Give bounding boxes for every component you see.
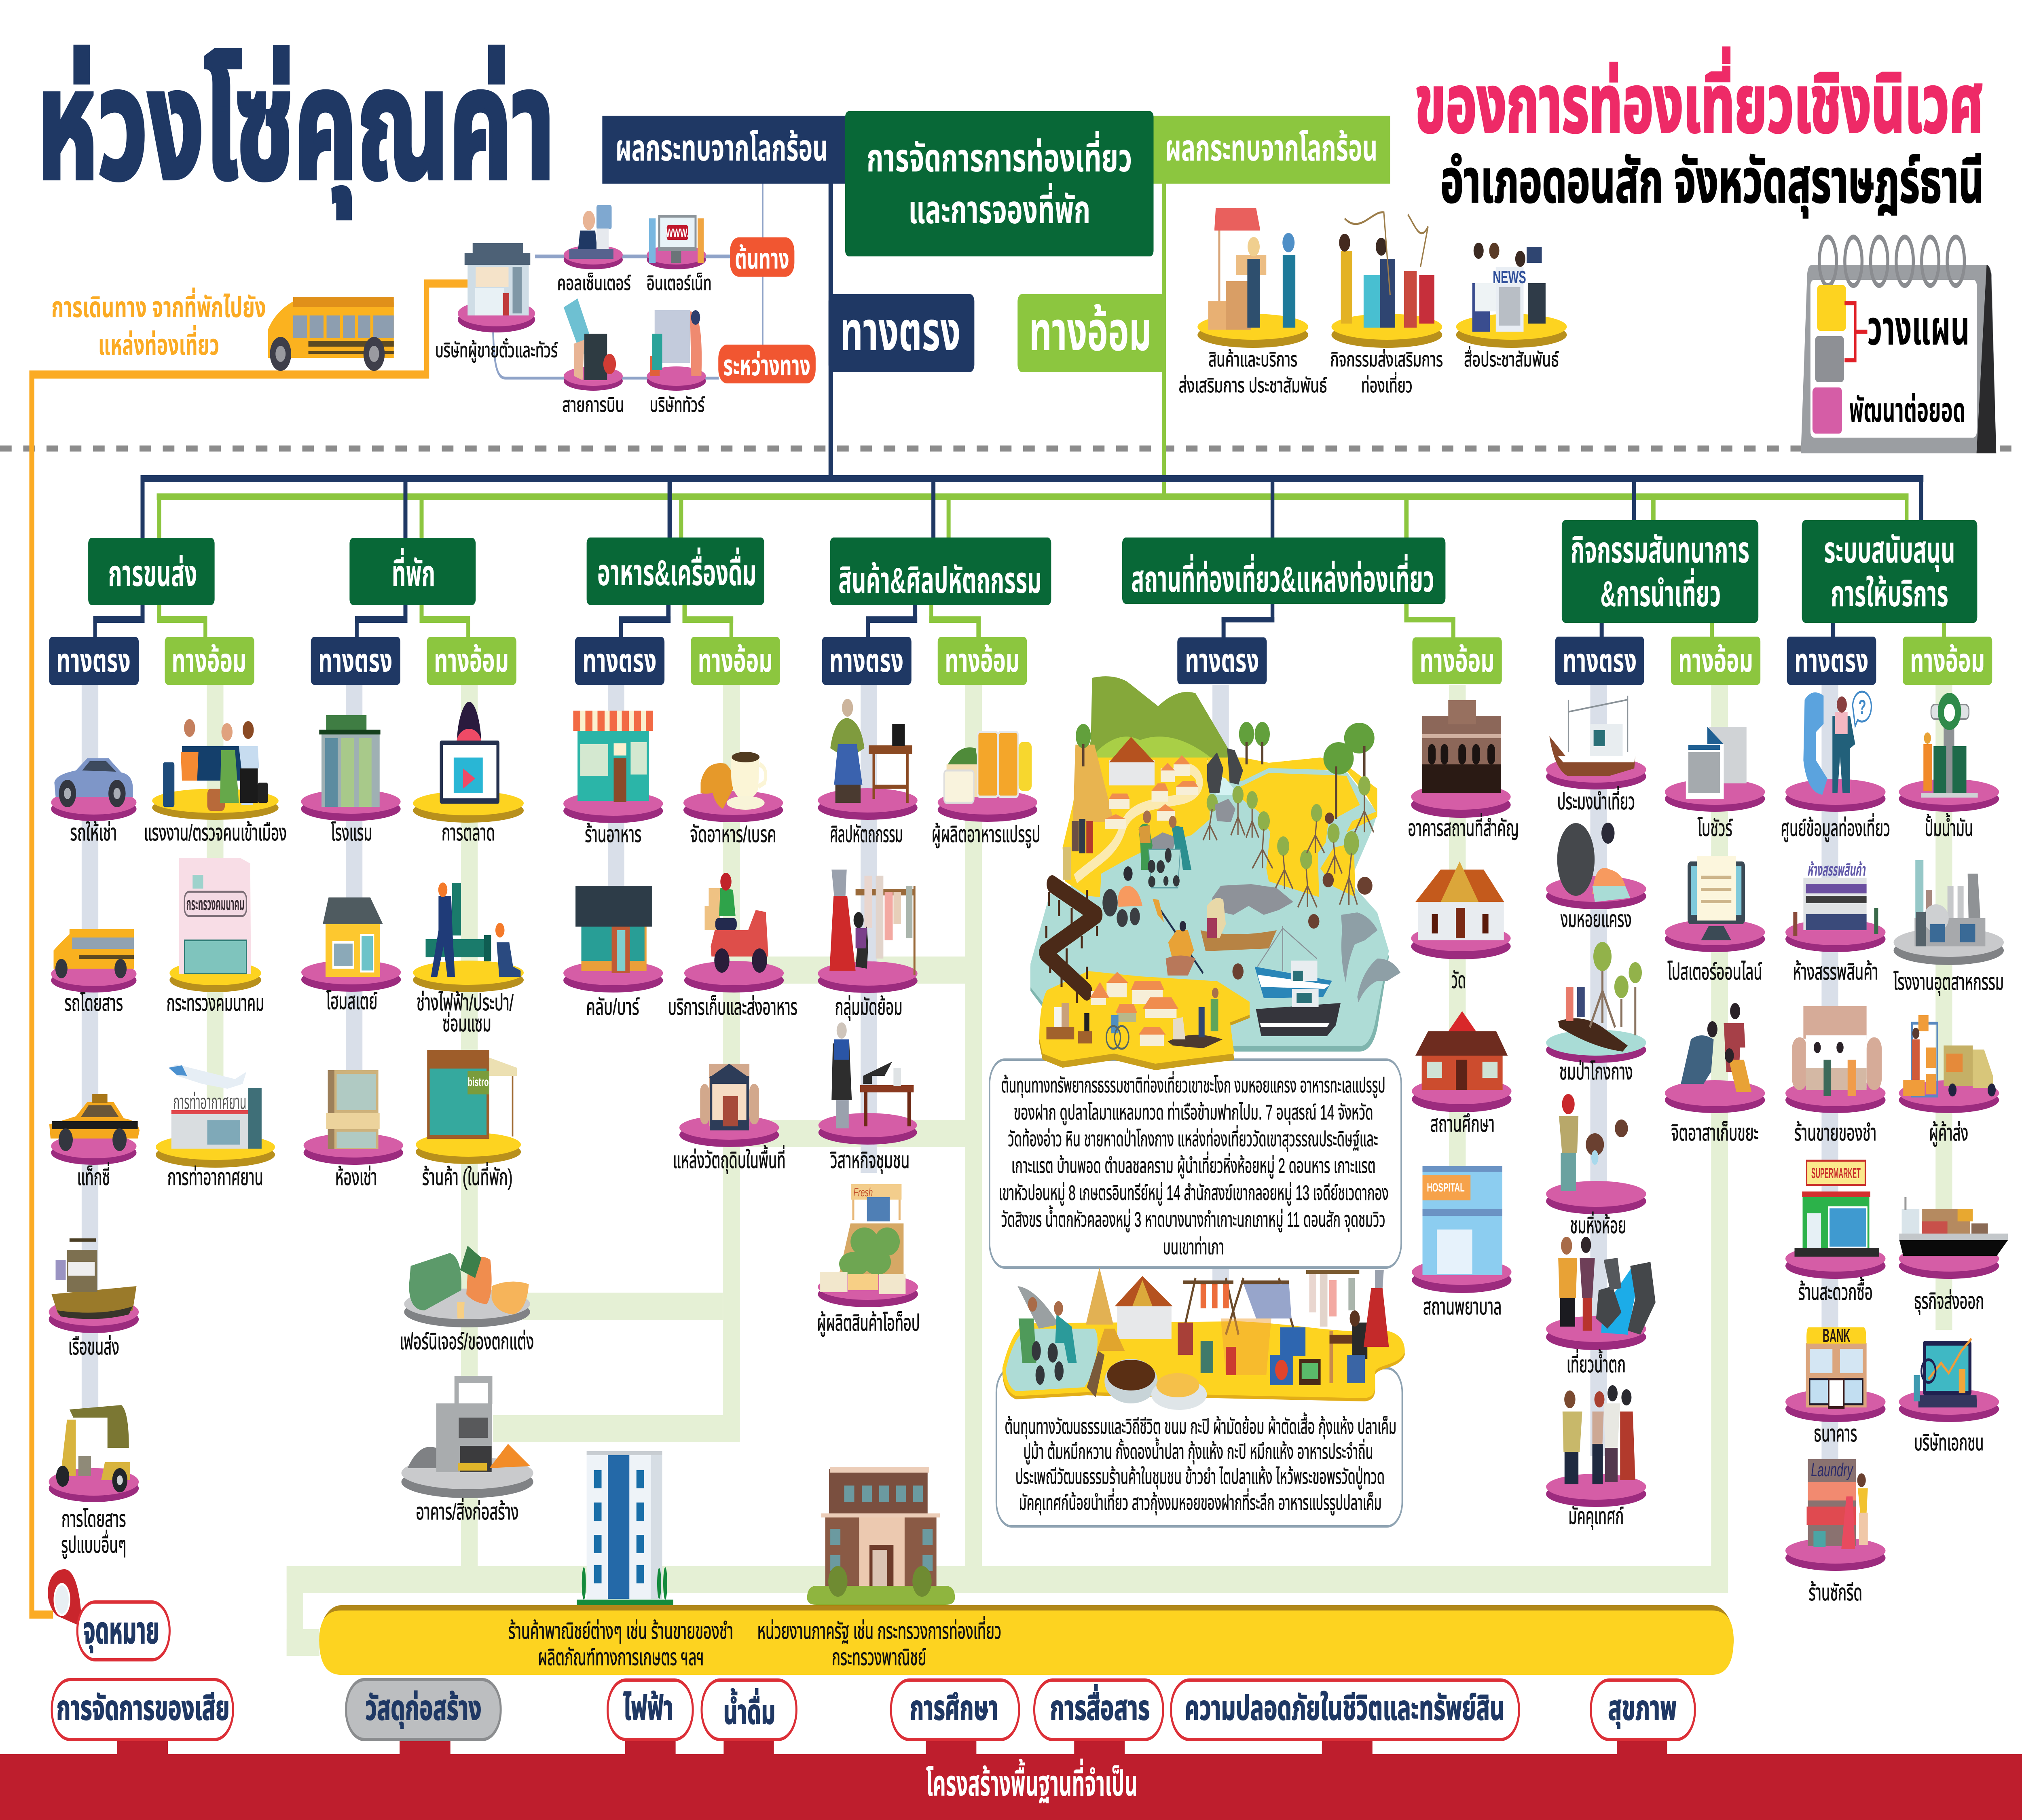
item: convenience store: SUPERMARKET — [1811, 1166, 1861, 1181]
item: important buildings: อาคารสถานที่สำคัญ — [1408, 813, 1519, 841]
item: public relations media: NEWS — [1493, 267, 1526, 287]
item: tour guide — [1546, 1385, 1646, 1530]
header: climate impact direct: ผลกระทบจากโลกร้อน — [615, 127, 828, 168]
item: cargo boat: เรือขนส่ง — [68, 1334, 119, 1359]
item: brochure: โบชัวร์ — [1698, 816, 1733, 841]
right title: ของการท่องเที่ยวเชิงนิเวศ — [1415, 48, 1984, 149]
pill: construction materials: วัสดุก่อสร้าง — [365, 1689, 482, 1729]
text box: natural resource capital — [990, 1060, 1401, 1268]
item: department store — [1785, 861, 1885, 984]
travel caption — [51, 288, 266, 361]
item: OTOP producer — [817, 1184, 920, 1336]
item: restaurant: ร้านอาหาร — [585, 822, 641, 847]
item: hospital: HOSPITAL — [1427, 1181, 1465, 1194]
sub-headers: direct and indirect tabs: ทางอ้อม — [434, 643, 509, 679]
badge: indirect: ทางอ้อม — [1029, 301, 1152, 362]
category: recreation and guiding: &การนำเที่ยว — [1600, 568, 1721, 614]
item: airline — [562, 298, 624, 416]
pill: electricity: ไฟฟ้า — [623, 1689, 673, 1727]
category: goods and crafts — [830, 538, 1051, 605]
category: food and drink: อาหาร&เครื่องดื่ม — [597, 547, 757, 593]
item: wholesaler: ผู้ค้าส่ง — [1929, 1120, 1968, 1146]
icon: calendar legend — [1801, 237, 1996, 453]
item: goods and services promotion — [1179, 208, 1327, 397]
illustration: eco-tourism nature map — [1030, 676, 1400, 1070]
item: furniture and decoration — [400, 1246, 534, 1354]
item: building and construction — [401, 1376, 533, 1524]
header: tourism management: การจัดการการท่องเที่ยว — [867, 131, 1132, 180]
item: club and bar: คลับ/บาร์ — [586, 995, 640, 1020]
text box: natural resource capital: ต้นทุนทางทรัพยากรธรรมชาติท่องเที่ยวเขาชะโงก งมหอยแครง อาหารทะเลแปรรูป — [1001, 1071, 1385, 1098]
item: mangrove forest visit — [1546, 942, 1646, 1084]
illustration: culture and way of life — [1003, 1268, 1405, 1410]
sub-headers: direct and indirect tabs: ทางตรง — [1563, 643, 1637, 679]
sub-headers: direct and indirect tabs: ทางตรง — [1185, 643, 1259, 679]
item: community enterprise — [819, 1022, 917, 1174]
pale background stripes linking the value chain — [82, 685, 1952, 1656]
pill: destination — [77, 1602, 169, 1660]
item: industrial plant — [1893, 860, 2004, 995]
item: call center: คอลเซ็นเตอร์ — [557, 271, 631, 294]
item: internet: อินเตอร์เน็ท — [647, 271, 712, 294]
text box: culture and way of life capital: ประเพณีวัฒนธรรมร้านค้าในชุมชน ข้าวยำ ไตปลาแห้ง ไหว้พระขอพรวัดปู่ทวด — [1015, 1465, 1385, 1489]
sub-headers: direct and indirect tabs: ทางอ้อม — [698, 643, 773, 679]
category: recreation and guiding — [1562, 520, 1758, 623]
pill: in transit — [718, 345, 816, 383]
item: tour guide: มัคคุเทศก์ — [1568, 1504, 1624, 1530]
item: waterfall trip — [1546, 1237, 1656, 1377]
pill: communication — [1034, 1680, 1163, 1740]
icon: destination pin — [48, 1569, 82, 1627]
item: tie-dye group: กลุ่มมัดย้อม — [835, 995, 903, 1020]
item: OTOP producer: Fresh — [853, 1186, 873, 1199]
pill: safety of life and property: ความปลอดภัยในชีวิตและทรัพย์สิน — [1185, 1689, 1504, 1727]
item: processed food producer: ผู้ผลิตอาหารแปรรูป — [932, 822, 1040, 848]
pill: health: สุขภาพ — [1608, 1689, 1677, 1729]
item: furniture and decoration: เฟอร์นิเจอร์/ของตกแต่ง — [400, 1329, 534, 1354]
category: accommodation: ที่พัก — [392, 548, 435, 594]
infrastructure band — [0, 1737, 2022, 1820]
item: gas station — [1899, 693, 1999, 841]
item: other transport (tuk-tuk) — [49, 1405, 139, 1558]
pill: communication: การสื่อสาร — [1050, 1684, 1150, 1727]
item: hospital — [1412, 1166, 1512, 1319]
item: volunteer waste collection: จิตอาสาเก็บขยะ — [1671, 1120, 1759, 1145]
item: catering — [683, 752, 783, 847]
item: goods and services promotion: ส่งเสริมการ ประชาสัมพันธ์ — [1179, 374, 1327, 397]
item: homestay — [301, 897, 401, 1014]
item: grocery shop — [1785, 1006, 1885, 1145]
pill: in transit: ระหว่างทาง — [723, 350, 810, 382]
text box: natural resource capital: ของฝาก ดูปลาโลมาแหลมทวด ท่าเรือข้ามฟากไปม. 7 อนุสรณ์ 14 จังหวัด — [1014, 1101, 1373, 1125]
pill: drinking water — [702, 1680, 796, 1740]
item: electrician and plumber: ซ่อมแซม — [442, 1011, 491, 1036]
item: industrial plant: โรงงานอุตสาหกรรม — [1893, 969, 2004, 995]
item: food delivery: บริการเก็บและส่งอาหาร — [668, 995, 797, 1020]
item: fishing tour: ประมงนำเที่ยว — [1557, 786, 1635, 814]
yellow foundation bar with captions: ร้านค้าพาณิชย์ต่างๆ เช่น ร้านขายของชำ — [508, 1619, 733, 1644]
item: department store: ห้างสรรพสินค้า — [1807, 861, 1866, 880]
pill: drinking water: น้ำดื่ม — [723, 1688, 776, 1731]
pill: waste management: การจัดการของเสีย — [57, 1689, 230, 1727]
item: tourist information center: ศูนย์ข้อมูลท่องเที่ยว — [1781, 813, 1890, 842]
item: convenience store: ร้านสะดวกซื้อ — [1798, 1276, 1873, 1305]
item: tourist information center: ? — [1858, 695, 1866, 718]
header: tourism management: และการจองที่พัก — [908, 183, 1090, 231]
text box: natural resource capital: บนเขาท่าเภา — [1163, 1236, 1224, 1259]
icon: calendar legend: พัฒนาต่อยอด — [1849, 391, 1965, 429]
sub-headers: direct and indirect tabs: ทางตรง — [318, 643, 392, 679]
dashed divider — [0, 446, 2022, 451]
item: workers and immigration — [144, 719, 287, 845]
text box: culture and way of life capital — [996, 1368, 1402, 1526]
orange travel route line — [32, 284, 467, 1615]
item: goods and services promotion: สินค้าและบริการ — [1208, 348, 1297, 371]
yellow foundation bar with captions: ผลิตภัณฑ์ทางการเกษตร ฯลฯ — [538, 1645, 704, 1670]
item: bank: ธนาคาร — [1814, 1421, 1857, 1446]
item: tourist information center — [1781, 692, 1890, 842]
item: marketing: การตลาด — [442, 820, 495, 845]
item: tour company — [647, 310, 706, 416]
item: laundry: Laundry — [1811, 1460, 1854, 1481]
item: hotel — [301, 715, 401, 845]
item: school — [1412, 1011, 1512, 1136]
sub-headers: direct and indirect tabs: ทางอ้อม — [1420, 643, 1495, 679]
text box: culture and way of life capital: ต้นทุนทางวัฒนธรรมและวิถีชีวิต ขนม กะปิ ผ้ามัดย้อม ผ้าตัดเสื้อ กุ้งแห้ง ปลาเค็ม — [1005, 1412, 1396, 1439]
badge: direct: ทางตรง — [840, 301, 960, 362]
item: firefly watching — [1546, 1094, 1646, 1238]
item: ministry of transport — [167, 858, 264, 1016]
item: rental rooms — [304, 1070, 403, 1190]
item: important buildings — [1408, 700, 1519, 841]
item: restaurant — [563, 711, 663, 847]
item: gas station: ปั้มน้ำมัน — [1925, 813, 1973, 841]
pill: health — [1591, 1680, 1695, 1740]
infrastructure band: โครงสร้างพื้นฐานที่จำเป็น — [926, 1758, 1138, 1803]
pill: waste management — [52, 1680, 233, 1740]
item: airports authority — [156, 1064, 275, 1190]
item: tourism promotion activities: กิจกรรมส่งเสริมการ — [1330, 348, 1443, 371]
item: tie-dye group — [818, 870, 918, 1020]
pill: origin — [730, 237, 794, 277]
item: tourism promotion activities: ท่องเที่ยว — [1361, 371, 1413, 397]
item: laundry: ร้านซักรีด — [1809, 1580, 1862, 1605]
badge: indirect — [1017, 294, 1165, 372]
item: grocery shop: ร้านขายของชำ — [1794, 1120, 1876, 1145]
item: public relations media — [1456, 243, 1567, 371]
item: bank: BANK — [1823, 1325, 1851, 1346]
icon: school bus — [268, 297, 394, 371]
yellow foundation bar with captions: กระทรวงพาณิชย์ — [832, 1645, 926, 1670]
sub-headers: direct and indirect tabs: ทางตรง — [57, 643, 131, 679]
item: other transport (tuk-tuk): รูปแบบอื่นๆ — [61, 1529, 126, 1558]
item: catering: จัดอาหาร/เบรค — [690, 822, 776, 847]
text box: natural resource capital: เขาหัวปอนหมู่ 8 เกษตรอินทรีย์หมู่ 14 สำนักสงฆ์เขากลอยหมู่ 13 เจดีย์ชเวดากอง — [999, 1181, 1389, 1205]
item: ticket and tour seller: บริษัทผู้ขายตั๋วและทัวร์ — [435, 337, 558, 362]
item: clam collecting — [1546, 823, 1646, 932]
category: transport: การขนส่ง — [108, 553, 197, 594]
icon: government building — [807, 1467, 955, 1605]
item: processed food producer — [932, 732, 1040, 848]
item: other transport (tuk-tuk): การโดยสาร — [61, 1507, 126, 1532]
item: taxi — [49, 1094, 140, 1190]
header: climate impact indirect — [1153, 116, 1390, 184]
item: tourism promotion activities — [1330, 212, 1443, 397]
pill: electricity — [607, 1680, 693, 1740]
icon: commercial building — [577, 1451, 673, 1605]
item: school: สถานศึกษา — [1430, 1111, 1495, 1136]
text box: natural resource capital: วัดสิงขร น้ำตกหัวคลองหมู่ 3 หาดบางนางกำเกาะนกเภาหมู่ 11 ดอนสัก จุดชมวิว — [1001, 1205, 1385, 1232]
item: internet: WWW. — [666, 226, 689, 240]
category: accommodation — [349, 538, 476, 605]
item: brochure — [1665, 727, 1765, 841]
header: climate impact indirect: ผลกระทบจากโลกร้อน — [1165, 127, 1377, 168]
item: bus — [51, 929, 137, 1016]
badge: direct — [829, 294, 974, 372]
text box: natural resource capital: วัดท้องอ่าว หิน ชายหาดป่าโกงกาง แหล่งท่องเที่ยววัดเขาสุวรรณประดิษฐ์และ — [1008, 1125, 1378, 1151]
item: rental car — [51, 758, 137, 845]
item: ministry of transport: กระทรวงคมนาคม — [186, 894, 244, 914]
item: hotel: โรงแรม — [331, 820, 372, 845]
sub-headers: direct and indirect tabs: ทางตรง — [829, 643, 903, 679]
item: mangrove forest visit: ชมป่าโกงกาง — [1559, 1059, 1633, 1084]
travel caption: การเดินทาง จากที่พักไปยัง — [51, 288, 266, 324]
item: temple: วัด — [1451, 968, 1466, 993]
pill: safety of life and property — [1171, 1680, 1519, 1740]
item: fishing tour — [1546, 696, 1646, 814]
sub-headers: direct and indirect tabs: ทางอ้อม — [945, 643, 1019, 679]
sub-headers: direct and indirect tabs: ทางอ้อม — [1678, 643, 1753, 679]
item: public relations media: สื่อประชาสัมพันธ์ — [1464, 345, 1559, 371]
item: ministry of transport: กระทรวงคมนาคม — [167, 990, 264, 1016]
connector lines: indirect (green) — [157, 184, 1946, 637]
item: bus: รถโดยสาร — [65, 990, 123, 1016]
pill: destination: จุดหมาย — [83, 1610, 159, 1653]
item: local raw material sources: แหล่งวัตถุดิบในพื้นที่ — [673, 1145, 786, 1174]
category: support services: การให้บริการ — [1831, 573, 1948, 614]
item: electrician and plumber — [413, 882, 524, 1036]
category: recreation and guiding: กิจกรรมสันทนาการ — [1571, 529, 1749, 570]
item: cargo boat — [49, 1238, 139, 1359]
pill: construction materials — [346, 1680, 501, 1740]
item: private company: บริษัทเอกชน — [1914, 1430, 1984, 1455]
item: online poster: โปสเตอร์ออนไลน์ — [1667, 959, 1762, 984]
item: internet — [647, 215, 712, 294]
text box: culture and way of life capital: ปูม้า ต้มหมึกหวาน กั้งดองน้ำปลา กุ้งแห้ง กะปิ หมึกแห้ง อาหารประจำถิ่น — [1024, 1437, 1373, 1464]
category: attractions: สถานที่ท่องเที่ยว&แหล่งท่องเที่ยว — [1131, 554, 1434, 599]
category: goods and crafts: สินค้า&ศิลปหัตถกรรม — [838, 560, 1042, 601]
item: clam collecting: งมหอยแครง — [1561, 907, 1632, 932]
item: building and construction: อาคาร/สิ่งก่อสร้าง — [416, 1498, 519, 1524]
item: shop in accommodation: bistro — [467, 1075, 489, 1089]
item: firefly watching: ชมหิ่งห้อย — [1570, 1211, 1626, 1238]
pill: education — [891, 1680, 1019, 1740]
header: tourism management — [845, 111, 1153, 256]
item: airports authority: การท่าอากาศยาน — [173, 1090, 246, 1113]
header: climate impact direct — [602, 116, 846, 184]
sub-headers: direct and indirect tabs: ทางตรง — [582, 643, 656, 679]
item: rental rooms: ห้องเช่า — [335, 1165, 377, 1190]
origin to journey connector lines — [493, 184, 763, 378]
item: taxi: แท็กซี่ — [77, 1162, 110, 1190]
item: marketing — [413, 702, 524, 845]
category: food and drink — [587, 538, 764, 605]
icon: calendar legend: วางแผน — [1867, 301, 1969, 355]
item: OTOP producer: ผู้ผลิตสินค้าโอท็อป — [817, 1310, 920, 1336]
item: waterfall trip: เที่ยวน้ำตก — [1567, 1349, 1626, 1377]
text box: culture and way of life capital: มัคคุเทศก์น้อยนำเที่ยว สาวกุ้งงมหอยของฝากที่ระลึก อาหารแปรรูปปลาเค็ม — [1019, 1488, 1382, 1515]
category: transport — [88, 538, 215, 605]
item: shop in accommodation — [416, 1050, 521, 1190]
item: export business: ธุรกิจส่งออก — [1914, 1289, 1984, 1314]
item: export business — [1899, 1197, 2008, 1314]
sub-headers: direct and indirect tabs — [49, 637, 1992, 685]
right subtitle: อำเภอดอนสัก จังหวัดสุราษฎร์ธานี — [1440, 147, 1984, 218]
text box: natural resource capital: เกาะแรต บ้านพอด ตำบลชลคราม ผู้นำเที่ยวหิ่งห้อยหมู่ 2 ดอนหาร เกาะแรต — [1011, 1151, 1376, 1178]
item: convenience store — [1785, 1161, 1885, 1305]
item: electrician and plumber: ช่างไฟฟ้า/ประปา/ — [417, 990, 514, 1015]
item: ticket and tour seller — [435, 243, 558, 362]
item: airline: สายการบิน — [562, 393, 624, 416]
category: attractions — [1122, 538, 1445, 604]
item: temple — [1411, 861, 1511, 993]
yellow foundation bar with captions: หน่วยงานภาครัฐ เช่น กระทรวงการท่องเที่ยว — [757, 1615, 1001, 1644]
item: tour company: บริษัททัวร์ — [650, 393, 705, 416]
item: rental car: รถให้เช่า — [70, 820, 117, 845]
pill: origin: ต้นทาง — [735, 243, 789, 275]
sub-headers: direct and indirect tabs: ทางอ้อม — [1910, 643, 1985, 679]
main title: ห่วงโซ่คุณค่า — [37, 39, 555, 219]
item: local raw material sources — [673, 1064, 786, 1174]
category: support services: ระบบสนับสนุน — [1824, 529, 1955, 572]
travel caption: แหล่งท่องเที่ยว — [98, 325, 219, 361]
item: food delivery — [668, 873, 797, 1020]
item: volunteer waste collection — [1665, 1003, 1765, 1145]
item: handicrafts — [818, 699, 918, 847]
item: workers and immigration: แรงงาน/ตรวจคนเข้าเมือง — [144, 820, 287, 845]
item: private company — [1899, 1339, 1999, 1455]
item: homestay: โฮมสเตย์ — [326, 989, 377, 1014]
sub-headers: direct and indirect tabs: ทางตรง — [1794, 643, 1868, 679]
item: department store: ห้างสรรพสินค้า — [1793, 959, 1878, 984]
sub-headers: direct and indirect tabs: ทางอ้อม — [171, 643, 246, 679]
category: support services — [1802, 520, 1977, 623]
item: bank — [1785, 1325, 1885, 1446]
item: laundry — [1785, 1459, 1885, 1605]
item: community enterprise: วิสาหกิจชุมชน — [830, 1148, 909, 1174]
pill: education: การศึกษา — [910, 1689, 998, 1727]
item: call center — [557, 205, 631, 294]
item: hospital: สถานพยาบาล — [1423, 1294, 1502, 1319]
item: online poster — [1665, 856, 1765, 984]
connector lines: direct (navy) — [93, 184, 1923, 637]
item: club and bar — [563, 886, 663, 1020]
yellow foundation bar with captions — [319, 1605, 1734, 1675]
item: handicrafts: ศิลปหัตถกรรม — [830, 822, 903, 847]
item: shop in accommodation: ร้านค้า (ในที่พัก) — [422, 1162, 513, 1190]
item: airports authority: การท่าอากาศยาน — [167, 1165, 263, 1190]
item: wholesaler — [1899, 1015, 1999, 1146]
